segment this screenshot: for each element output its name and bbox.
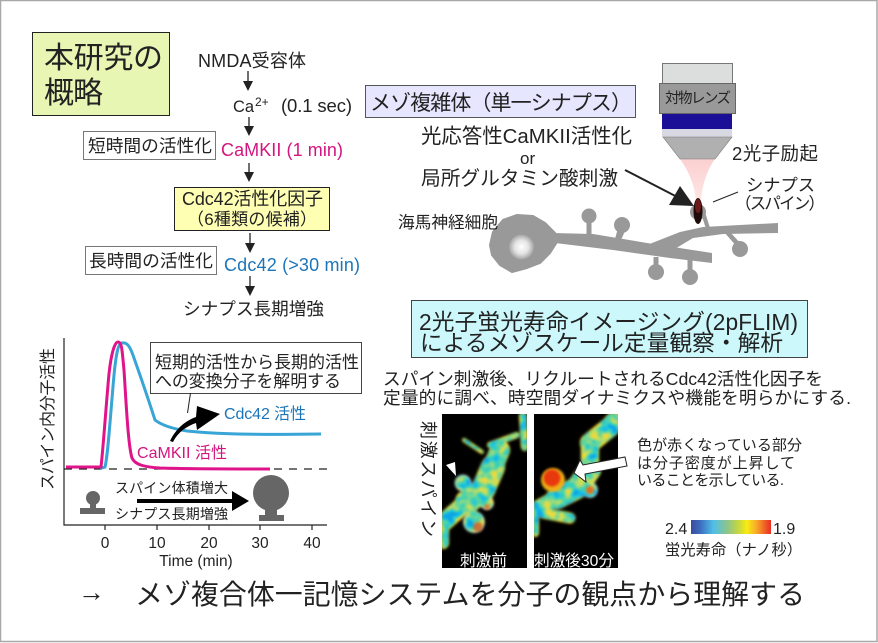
axes bbox=[64, 338, 327, 530]
tick labels: 20 bbox=[200, 535, 218, 552]
icon: large spine bbox=[253, 475, 289, 521]
heading: meso complex bbox=[366, 86, 636, 118]
label: Ca2+: 2+ bbox=[255, 95, 269, 109]
label: Cdc42 activity: Cdc42 活性 bbox=[224, 405, 306, 423]
arrow: growth bbox=[137, 491, 249, 511]
box: long-term activation bbox=[86, 246, 216, 274]
nucleus bbox=[509, 234, 534, 260]
heading: 2pFLIM: 2光子蛍光寿命イメージング(2pFLIM) bbox=[419, 309, 798, 335]
tick labels: 0 bbox=[101, 535, 110, 552]
lens label: 対物レンズ bbox=[665, 90, 731, 107]
label: synapse spine: （スパイン） bbox=[735, 194, 825, 213]
text: colour explanation: いることを示している. bbox=[637, 472, 784, 489]
label: Ca2+ bbox=[233, 95, 352, 116]
label: before: 刺激前 bbox=[460, 552, 507, 570]
box: Cdc42 activating factors bbox=[174, 188, 330, 230]
text: stimulation methods bbox=[421, 125, 632, 190]
text: stimulation methods: 光応答性CaMKII活性化 bbox=[421, 125, 632, 148]
text: imaging description: 定量的に調べ、時空間ダイナミクスや機能を明らかにする. bbox=[383, 388, 851, 408]
time-course chart bbox=[39, 338, 362, 570]
conclusion: メゾ複合体一記憶システムを分子の観点から理解する bbox=[135, 579, 805, 610]
title bbox=[32, 32, 170, 116]
image: before stimulation bbox=[442, 414, 527, 570]
flow diagram: signaling cascade bbox=[84, 51, 360, 319]
label: hippocampal neuron: 海馬神経細胞 bbox=[398, 213, 498, 232]
tick labels: 40 bbox=[303, 535, 321, 552]
text: stimulation methods: 局所グルタミン酸刺激 bbox=[421, 168, 618, 190]
text: colour explanation bbox=[637, 437, 802, 489]
callout: conversion molecule bbox=[150, 342, 362, 394]
label: two-photon excitation: 2光子励起 bbox=[732, 143, 818, 164]
label: CaMKII activity: CaMKII 活性 bbox=[137, 444, 227, 462]
dendrites bbox=[553, 223, 778, 263]
conclusion: → bbox=[78, 577, 105, 607]
label: spine enlargement: スパイン体積増大 bbox=[115, 480, 228, 496]
icon: small spine bbox=[80, 491, 105, 514]
label: NMDA receptor: NMDA受容体 bbox=[198, 51, 306, 71]
spines bbox=[582, 208, 748, 285]
text: stimulation methods: or bbox=[520, 149, 535, 168]
title: 概略 bbox=[44, 77, 103, 110]
focal spot bbox=[694, 198, 702, 224]
label: synaptic potentiation: シナプス長期増強 bbox=[115, 506, 228, 522]
heading: 2pFLIM bbox=[412, 300, 808, 358]
x axis label: Time (min) bbox=[159, 553, 233, 570]
arrow: white pointer bbox=[574, 457, 627, 482]
box: Cdc42 activating factors: Cdc42活性化因子 bbox=[182, 189, 323, 209]
image: 30 min after stimulation bbox=[534, 414, 618, 570]
legend: fluorescence lifetime: 2.4 bbox=[665, 521, 687, 538]
callout: conversion molecule: 短期的活性から長期的活性 bbox=[155, 353, 359, 372]
laser beam bbox=[680, 159, 715, 201]
tick labels: 30 bbox=[251, 535, 269, 552]
callout leader bbox=[188, 393, 190, 413]
legend: fluorescence lifetime: 1.9 bbox=[773, 521, 795, 538]
soma bbox=[490, 215, 557, 272]
tick labels: 10 bbox=[148, 535, 166, 552]
text: imaging description bbox=[383, 369, 851, 408]
arrow: Ca to CaMKII bbox=[244, 117, 254, 136]
curve: Cdc42 bbox=[100, 343, 321, 468]
label: synaptic potentiation: シナプス長期増強 bbox=[183, 299, 324, 319]
text: imaging description: スパイン刺激後、リクルートされるCdc42活性化因子を bbox=[383, 369, 823, 389]
heading: meso complex: メゾ複雑体（単一シナプス） bbox=[370, 92, 632, 115]
label: Ca2+: (0.1 sec) bbox=[281, 95, 352, 116]
legend: fluorescence lifetime bbox=[665, 520, 802, 559]
baseline bbox=[64, 468, 327, 470]
label: 30 min after: 刺激後30分 bbox=[534, 552, 614, 570]
illustration: neuron bbox=[490, 204, 778, 285]
y axis label: スパイン内分子活性 bbox=[39, 348, 57, 490]
marker: arrowhead bbox=[446, 462, 456, 476]
label: synapse spine: シナプス bbox=[746, 175, 815, 195]
tick labels bbox=[101, 535, 321, 552]
arrow: CaMKII to GEF bbox=[244, 163, 254, 182]
box: long-term activation: 長時間の活性化 bbox=[89, 251, 213, 271]
box: Cdc42 activating factors: （6種類の候補） bbox=[187, 210, 317, 229]
curve: CaMKII bbox=[66, 342, 270, 469]
label: Ca2+: Ca bbox=[233, 98, 255, 116]
label: Cdc42: Cdc42 (>30 min) bbox=[224, 255, 360, 275]
arrow: stimulation bbox=[625, 170, 694, 206]
label: CaMKII: CaMKII (1 min) bbox=[221, 140, 343, 160]
arrow: GEF to Cdc42 bbox=[245, 233, 255, 253]
callout: conversion molecule: への変換分子を解明する bbox=[155, 372, 341, 391]
label: synapse spine bbox=[735, 175, 825, 213]
leader line bbox=[713, 192, 738, 202]
text: colour explanation: 色が赤くなっている部分 bbox=[637, 437, 802, 454]
box: short-term activation bbox=[84, 132, 216, 160]
stimulated spine bbox=[701, 212, 710, 229]
illustration: objective lens bbox=[660, 64, 736, 201]
heading: 2pFLIM: によるメゾスケール定量観察・解析 bbox=[420, 330, 783, 356]
arrow: Cdc42 to LTP bbox=[245, 276, 255, 296]
legend: fluorescence lifetime: 蛍光寿命（ナノ秒） bbox=[665, 542, 802, 559]
title: 本研究の bbox=[44, 42, 163, 75]
arrow: NMDA to Ca bbox=[243, 71, 253, 91]
arrow: conversion bbox=[170, 406, 220, 442]
box: short-term activation: 短時間の活性化 bbox=[88, 136, 212, 156]
text: colour explanation: は分子密度が上昇して bbox=[637, 455, 795, 472]
label: stimulated spine: 刺激スパイン bbox=[418, 421, 438, 537]
